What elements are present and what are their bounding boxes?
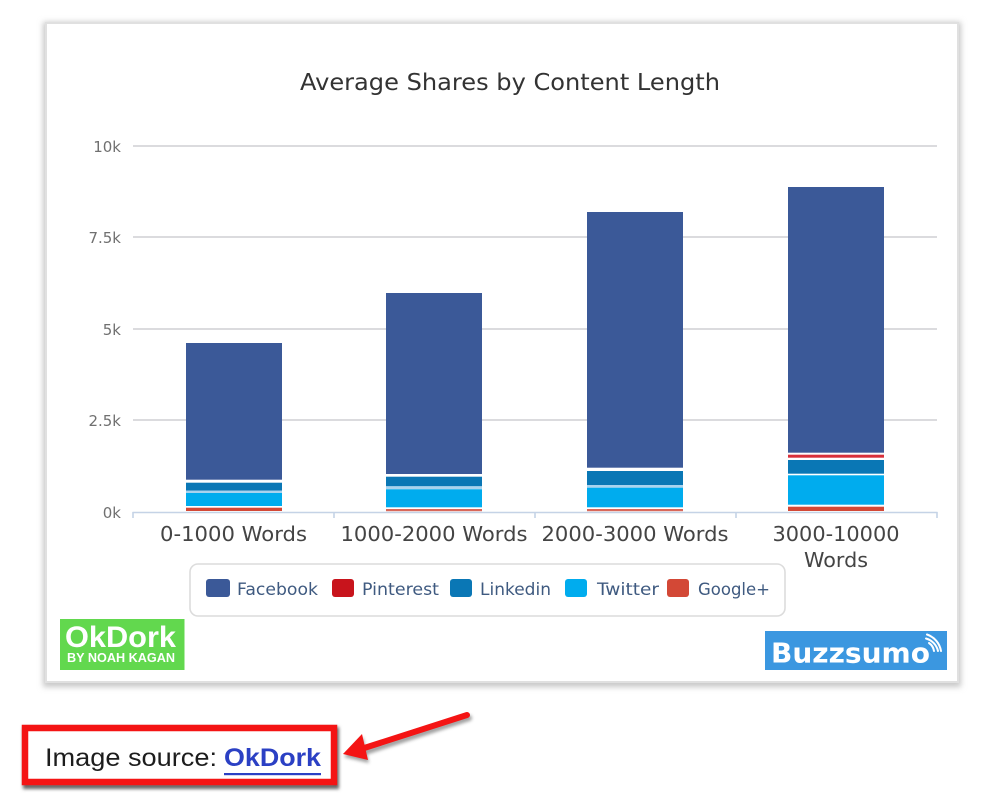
stacked bar: 2000-3000 Words	[587, 212, 683, 511]
x-axis category labels: 0-1000 Words	[160, 522, 307, 546]
link: OkDork: OkDork	[224, 744, 321, 772]
x-axis category labels: 1000-2000 Words	[340, 522, 528, 546]
x-axis category labels: 2000-3000 Words	[542, 522, 728, 546]
y-axis gridlines and labels: 0k	[103, 504, 121, 522]
logo: OkDork: BY NOAH KAGAN	[67, 651, 175, 665]
chart title: Average Shares by Content Length	[300, 68, 720, 96]
x-axis category labels: 3000-10000	[772, 522, 900, 546]
x-axis category labels	[160, 522, 900, 572]
legend	[190, 564, 785, 616]
callout: image source box	[25, 728, 336, 786]
logo: OkDork	[60, 619, 184, 670]
logo: OkDork: OkDork	[65, 621, 176, 654]
legend: Twitter	[596, 580, 659, 600]
x-axis category labels: Words	[804, 548, 868, 572]
stacked bar: 1000-2000 Words	[386, 293, 482, 511]
y-axis gridlines and labels: 7.5k	[88, 229, 121, 247]
source text: Image source:	[45, 744, 217, 772]
logo: Buzzsumo: Buzzsumo	[771, 636, 930, 670]
arrow pointing to source box	[343, 715, 469, 763]
y-axis gridlines and labels: 10k	[93, 138, 121, 156]
legend: Pinterest	[362, 580, 439, 600]
x axis	[132, 512, 938, 518]
y-axis gridlines and labels: 5k	[103, 321, 121, 339]
legend: Linkedin	[480, 580, 551, 600]
stacked bar: 3000-10000 Words	[788, 187, 884, 511]
y-axis gridlines and labels: 2.5k	[88, 412, 121, 430]
panel: chart card	[43, 22, 961, 687]
legend: Google+	[698, 580, 770, 600]
stacked bar: 0-1000 Words	[186, 343, 282, 511]
y-axis gridlines and labels	[88, 138, 937, 522]
legend: Facebook	[237, 580, 318, 600]
